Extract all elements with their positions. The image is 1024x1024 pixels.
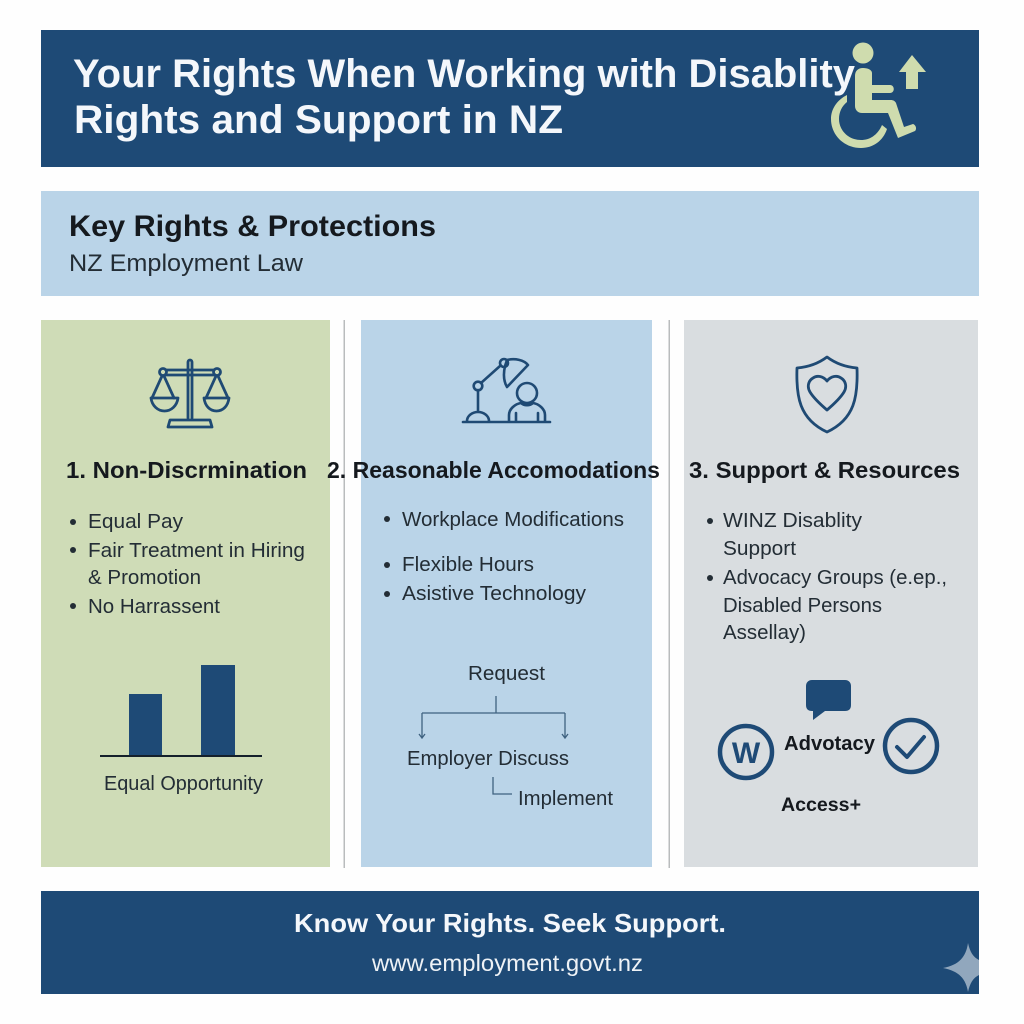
bullet list: Workplace Modifications bbox=[402, 509, 624, 531]
call to action: Know Your Rights. Seek Support. bbox=[294, 908, 726, 938]
icon: W badge bbox=[720, 726, 772, 778]
title bbox=[73, 52, 856, 142]
panel: non-discrimination bbox=[41, 320, 330, 867]
bullet list: Support bbox=[723, 538, 796, 560]
flow diagram: request process: Request bbox=[468, 663, 545, 685]
icon: check badge bbox=[885, 720, 937, 772]
icon: shield with heart bbox=[797, 357, 857, 432]
subheading: NZ employment law: NZ Employment Law bbox=[69, 250, 304, 277]
bullet list: Assellay) bbox=[723, 622, 806, 644]
bar chart: equal opportunity: Equal Opportunity bbox=[104, 773, 263, 795]
bullet list: No Harrassent bbox=[88, 596, 220, 618]
bullet list bbox=[707, 510, 947, 644]
header banner bbox=[41, 30, 979, 167]
title: Your Rights When Working with Disablity bbox=[73, 52, 856, 96]
bullet list: WINZ Disablity bbox=[723, 510, 862, 532]
icon: wheelchair user with up arrow bbox=[831, 42, 926, 148]
website: www.employment.govt.nz bbox=[371, 950, 643, 976]
flow diagram: request process: Implement bbox=[518, 788, 613, 810]
bullet list: Disabled Persons bbox=[723, 595, 882, 617]
bullet list: Fair Treatment in Hiring bbox=[88, 540, 305, 562]
panel: support and resources bbox=[684, 320, 978, 867]
heading: 3. Support & Resources bbox=[689, 457, 960, 483]
label: advocacy: Advotacy bbox=[784, 733, 876, 755]
bullet list: Flexible Hours bbox=[402, 554, 534, 576]
heading: key rights: Key Rights & Protections bbox=[69, 210, 436, 243]
bullet list: Advocacy Groups (e.ep., bbox=[723, 567, 947, 589]
icon: speech bubble bbox=[806, 680, 851, 720]
heading: 1. Non-Discrmination bbox=[66, 457, 307, 483]
heading: 2. Reasonable Accomodations bbox=[327, 457, 660, 483]
icon: desk lamp and person bbox=[463, 359, 550, 422]
bullet list: & Promotion bbox=[88, 567, 201, 589]
key rights band bbox=[41, 191, 979, 296]
flow diagram: request process: Employer Discuss bbox=[407, 748, 569, 770]
label: access: Access+ bbox=[781, 795, 861, 816]
icon: sparkle bbox=[943, 943, 979, 992]
bullet list bbox=[384, 509, 624, 605]
panel: reasonable accommodations bbox=[327, 320, 660, 867]
icon: W badge: W bbox=[732, 737, 761, 770]
footer banner bbox=[41, 891, 979, 994]
bullet list bbox=[70, 511, 305, 618]
bullet list: Equal Pay bbox=[88, 511, 183, 533]
bullet list: Asistive Technology bbox=[402, 583, 586, 605]
icon: scales of justice bbox=[151, 360, 229, 427]
flow diagram: request process bbox=[407, 663, 613, 810]
bar chart: equal opportunity bbox=[100, 665, 263, 795]
title: Rights and Support in NZ bbox=[74, 98, 563, 142]
